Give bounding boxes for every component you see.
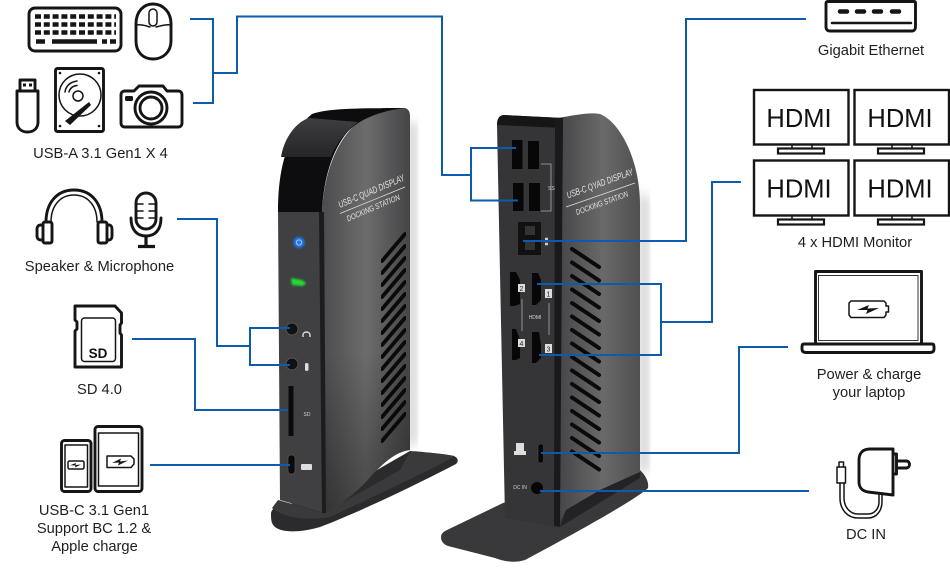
label: HDMI monitors: 4 x HDMI Monitor bbox=[798, 235, 912, 251]
panel: HDMI monitors bbox=[754, 90, 949, 251]
icon: monitor 4: HDMI bbox=[867, 176, 933, 204]
front vents bbox=[382, 222, 405, 453]
icon: mouse bbox=[136, 4, 171, 59]
rear dock top strip bbox=[497, 115, 563, 128]
rear dock side lower shade bbox=[560, 472, 640, 527]
icon: monitor 1: HDMI bbox=[766, 105, 832, 133]
label: Gigabit Ethernet: Gigabit Ethernet bbox=[818, 43, 924, 59]
front dock shadow bbox=[408, 120, 416, 450]
USB-A bracket: SS bbox=[548, 186, 555, 192]
headphone jack bbox=[286, 323, 310, 337]
panel: speaker and microphone bbox=[25, 190, 174, 275]
rear dock shadow bbox=[640, 190, 648, 474]
front dock gloss cap bbox=[278, 108, 405, 212]
icon: headphones bbox=[37, 190, 112, 243]
panel: Gigabit Ethernet bbox=[818, 2, 924, 59]
icon: laptop bbox=[802, 272, 934, 352]
rear dock face edge bbox=[554, 118, 563, 527]
text: dock name: DOCKING STATION bbox=[345, 193, 401, 223]
HDMI label bbox=[522, 299, 549, 335]
icon: Ethernet switch bbox=[826, 2, 916, 31]
rear vents bbox=[572, 249, 599, 470]
HDMI ports bbox=[510, 272, 541, 363]
rear dock face bbox=[497, 115, 563, 527]
HDMI number tags: 3 bbox=[547, 346, 551, 354]
icon: USB flash drive bbox=[17, 80, 38, 132]
USB-A ports bbox=[512, 140, 540, 211]
DC IN port bbox=[513, 482, 543, 494]
text: rear dock name: USB-C QYAD DISPLAY bbox=[565, 167, 635, 201]
icon: monitor 1 bbox=[754, 90, 848, 154]
HDMI number tags: 4 bbox=[520, 341, 524, 348]
label: USB-A: USB-A 3.1 Gen1 X 4 bbox=[33, 146, 168, 162]
icon: power adapter bbox=[837, 449, 910, 518]
USB-A bracket bbox=[541, 164, 555, 211]
label: DC IN: DC IN bbox=[846, 527, 886, 543]
panel: laptop bbox=[802, 272, 934, 401]
front dock base bbox=[271, 451, 458, 531]
label: support BC: Support BC 1.2 & bbox=[37, 521, 151, 537]
panel: USB-A devices bbox=[17, 4, 182, 162]
icon: monitor 4 bbox=[854, 160, 949, 224]
device: rear dock bbox=[441, 113, 809, 562]
icon: SD card: SD bbox=[89, 346, 108, 361]
DC IN port: DC IN bbox=[513, 485, 527, 491]
panel: USB-C devices bbox=[37, 426, 151, 555]
icon: phone bbox=[62, 440, 91, 492]
front dock side bbox=[322, 108, 410, 513]
SD slot bbox=[288, 386, 311, 436]
rear port leader ends bbox=[480, 148, 809, 491]
Ethernet port bbox=[518, 222, 548, 255]
icon: keyboard bbox=[29, 8, 121, 51]
front dock edge bbox=[319, 212, 326, 513]
label: SD: SD 4.0 bbox=[77, 382, 122, 398]
icon: tablet bbox=[95, 426, 142, 492]
device: front dock bbox=[260, 108, 458, 531]
panel: DC IN bbox=[837, 449, 910, 543]
icon: monitor 3: HDMI bbox=[766, 176, 832, 204]
mic jack bbox=[286, 358, 308, 371]
front dock lower face bbox=[278, 210, 325, 513]
icon: microphone bbox=[131, 193, 161, 246]
rear laptop port bbox=[514, 443, 544, 463]
HDMI label: HDMI bbox=[529, 315, 541, 321]
text: dock name: USB-C QUAD DISPLAY bbox=[337, 173, 407, 211]
icon: camera bbox=[121, 86, 182, 127]
text: dock name bbox=[337, 173, 407, 223]
panel: SD card bbox=[75, 306, 122, 398]
icon: monitor 2: HDMI bbox=[867, 105, 933, 133]
USB LED bbox=[291, 278, 306, 286]
front dock base top bbox=[272, 452, 454, 519]
HDMI number tags: 1 bbox=[547, 292, 551, 298]
front dock gloss band bbox=[281, 118, 358, 157]
front dock side shading bbox=[322, 108, 410, 513]
icon: monitor 2 bbox=[854, 90, 949, 154]
label: power and charge: Power & charge bbox=[817, 367, 921, 383]
SD slot: SD bbox=[304, 412, 311, 418]
label: your laptop: your laptop bbox=[833, 385, 905, 401]
connector lines bbox=[132, 16, 809, 491]
text: rear dock name bbox=[565, 167, 635, 217]
rear dock side bbox=[558, 113, 640, 525]
label: speaker and microphone: Speaker & Microphone bbox=[25, 259, 174, 275]
USB-C port bbox=[288, 455, 312, 474]
rear dock base bbox=[441, 470, 648, 562]
HDMI number tags: 2 bbox=[520, 286, 524, 293]
text: rear dock name: DOCKING STATION bbox=[575, 190, 630, 217]
power LED bbox=[294, 237, 304, 248]
icon: hard disk bbox=[56, 68, 104, 132]
icon: monitor 3 bbox=[754, 160, 848, 224]
label: Apple charge: Apple charge bbox=[51, 539, 138, 555]
label: USB-C: USB-C 3.1 Gen1 bbox=[39, 503, 149, 519]
HDMI number tags bbox=[518, 284, 552, 354]
front port leader ends bbox=[260, 328, 290, 465]
